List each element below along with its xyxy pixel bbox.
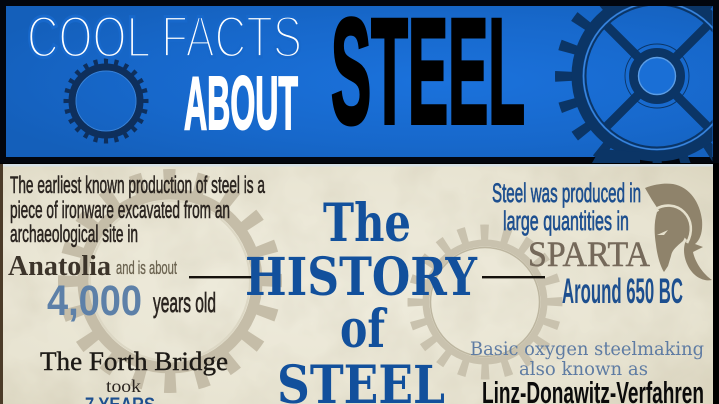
label: sparta: SPARTA xyxy=(528,234,650,274)
title: the history of steel: The xyxy=(323,193,411,254)
text block: earliest steel: The earliest known production of steel is a xyxy=(10,172,265,199)
text block: forth bridge: took xyxy=(106,376,141,396)
text block: sparta xyxy=(492,178,641,236)
text block: sparta: large quantities in xyxy=(503,206,629,236)
text block: basic oxygen xyxy=(470,338,704,380)
icon: small gear xyxy=(66,62,146,140)
text block: basic oxygen: Basic oxygen steelmaking xyxy=(470,338,704,360)
title: the history of steel: of xyxy=(340,299,388,360)
icon: left background gear xyxy=(69,180,271,382)
connector: left line xyxy=(189,276,252,278)
label: anatolia: Anatolia xyxy=(8,250,111,282)
title: the history of steel xyxy=(245,193,478,404)
title: the history of steel: HISTORY xyxy=(245,247,478,308)
header banner xyxy=(0,0,719,169)
stat: 4,000: 4,000 xyxy=(47,277,142,325)
text block: earliest steel xyxy=(10,172,265,248)
connector: right line xyxy=(482,276,545,278)
icon: large gear xyxy=(564,0,719,169)
icon: right background gear xyxy=(416,233,554,371)
text block: forth bridge: The Forth Bridge xyxy=(40,347,228,376)
text block: basic oxygen: also known as xyxy=(519,358,648,380)
icon: spartan helmet xyxy=(645,184,712,280)
heading: cool facts: COOL FACTS xyxy=(27,5,302,70)
text block: earliest steel: piece of ironware excavated from an xyxy=(10,197,230,224)
text block: earliest steel: archaeological site in xyxy=(10,221,138,248)
text: years old: years old xyxy=(153,287,216,318)
text: and is about: and is about xyxy=(116,258,177,278)
right edge bar xyxy=(713,163,719,404)
header banner: ABOUT xyxy=(184,61,298,145)
text block: forth bridge xyxy=(40,347,228,404)
paper panel xyxy=(0,163,719,404)
